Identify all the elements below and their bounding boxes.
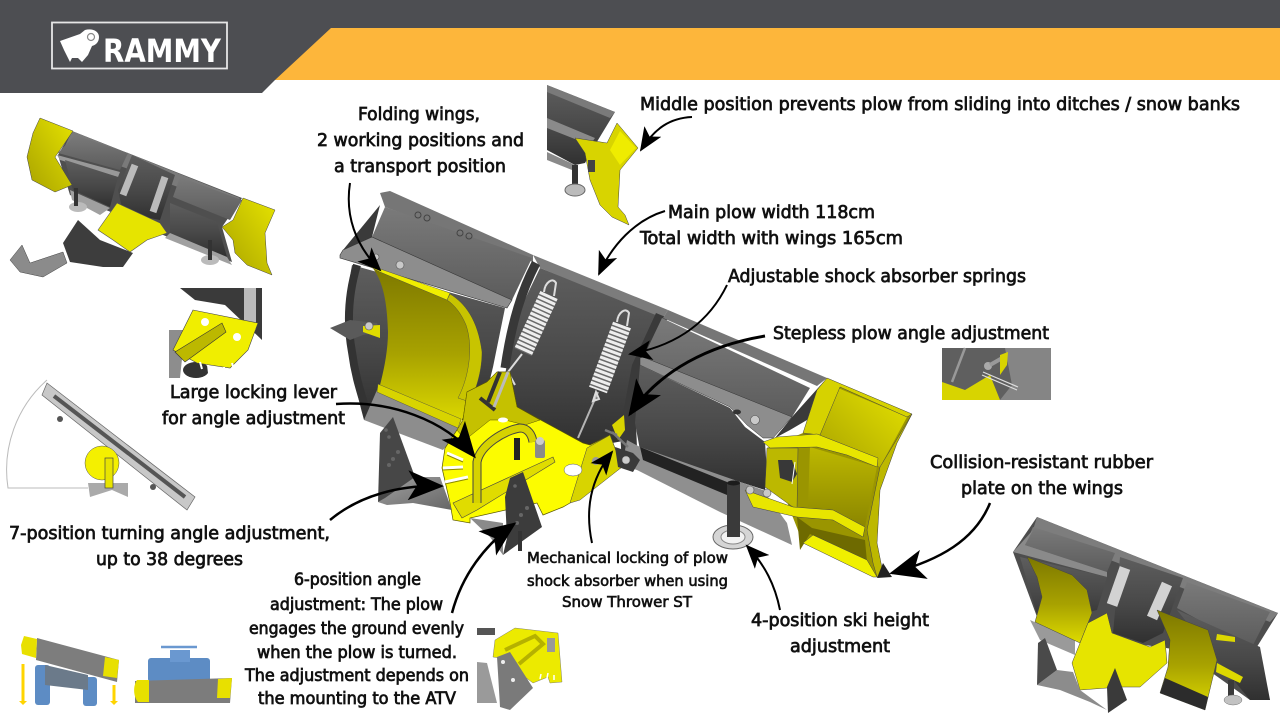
- orange banner: [275, 28, 1280, 80]
- logo: RAMMY: [52, 22, 227, 70]
- callout: plow width: Total width with wings 165cm: [639, 228, 903, 249]
- arrow: stepless plow angle: [630, 336, 765, 414]
- arrow: plow width: [599, 211, 665, 274]
- arrow: shock absorber springs: [630, 285, 727, 354]
- blade middle section: [505, 255, 668, 470]
- thumbnail: tilted plow front view: [19, 636, 119, 706]
- callout: locking lever: [162, 382, 345, 429]
- thumbnail: plow with mount: [10, 118, 275, 277]
- callout: locking lever: for angle adjustment: [162, 408, 345, 429]
- callout: mechanical locking: Mechanical locking of plow: [527, 549, 728, 567]
- callout: 6-position angle: engages the ground evenly: [249, 619, 464, 638]
- thumbnail: stepless angle adjustment: [942, 348, 1051, 400]
- callout: mechanical locking: Snow Thrower ST: [562, 593, 693, 611]
- heading: folding wings: a transport position: [334, 156, 506, 177]
- callout: middle position: Middle position prevents plow from sliding into ditches / snow banks: [640, 94, 1240, 115]
- yellow center frame: [442, 372, 640, 523]
- callout: 6-position angle: adjustment: The plow: [270, 595, 443, 614]
- thumbnail: skid height adjustment: [477, 628, 562, 710]
- callout: mechanical locking: [527, 549, 728, 611]
- main plow illustration: [330, 191, 912, 578]
- blade holes: [415, 212, 472, 239]
- callout: stepless plow angle: Stepless plow angle adjustment: [773, 323, 1049, 344]
- arrow: rubber plate: [892, 503, 990, 573]
- bolts: [365, 254, 771, 497]
- callout: shock absorber springs: Adjustable shock absorber springs: [728, 266, 1026, 287]
- thumbnail: middle wing position: [547, 85, 638, 225]
- right wing: [745, 378, 912, 578]
- thumbnail: locking lever detail: [169, 288, 262, 378]
- callout: ski height: [751, 610, 929, 657]
- callout: ski height: adjustment: [790, 636, 890, 657]
- blade left section: [330, 191, 533, 450]
- arrow: locking lever: [336, 403, 474, 456]
- callout: 6-position angle: the mounting to the ATV: [258, 689, 457, 708]
- arrow: turning angle: [330, 486, 441, 520]
- callout: 6-position angle: 6-position angle: [294, 570, 421, 589]
- logo: RAMMY: RAMMY: [103, 32, 222, 70]
- left folded wing: [363, 263, 482, 428]
- thumbnail: plow with folded wings: [1013, 517, 1278, 713]
- blade right section: [622, 310, 827, 545]
- callout: 6-position angle: when the plow is turned.: [257, 643, 457, 662]
- callout: 6-position angle: The adjustment depends on: [244, 666, 469, 685]
- callout: rubber plate: plate on the wings: [961, 478, 1123, 499]
- ski: [713, 480, 753, 549]
- callout: 6-position angle: [244, 570, 469, 708]
- callout: turning angle: [9, 523, 330, 570]
- heading: folding wings: Folding wings,: [358, 104, 480, 125]
- callout: ski height: 4-position ski height: [751, 610, 929, 631]
- thumbnail: ATV with level plow: [134, 647, 232, 703]
- arrow: middle position: [641, 117, 692, 150]
- callout: turning angle: up to 38 degrees: [96, 549, 243, 570]
- callout: rubber plate: [930, 452, 1153, 499]
- arrow: folding wings: [349, 183, 380, 270]
- callout: locking lever: Large locking lever: [170, 382, 337, 403]
- heading: folding wings: [317, 104, 524, 177]
- callout: mechanical locking: shock absorber when using: [527, 572, 728, 590]
- heading: folding wings: 2 working positions and: [317, 130, 524, 151]
- arrow: mechanical locking: [589, 452, 612, 543]
- arrow: 6-position angle: [452, 524, 514, 613]
- thumbnail: 38 degree turning angle: [7, 380, 195, 510]
- arrow: ski height: [747, 546, 780, 610]
- springs: [508, 280, 629, 438]
- skid plates: [378, 417, 542, 555]
- callout: plow width: [639, 202, 903, 249]
- callout: rubber plate: Collision-resistant rubber: [930, 452, 1153, 473]
- callout: turning angle: 7-position turning angle adjustment,: [9, 523, 330, 544]
- header band: [0, 0, 1280, 93]
- callout: plow width: Main plow width 118cm: [668, 202, 875, 223]
